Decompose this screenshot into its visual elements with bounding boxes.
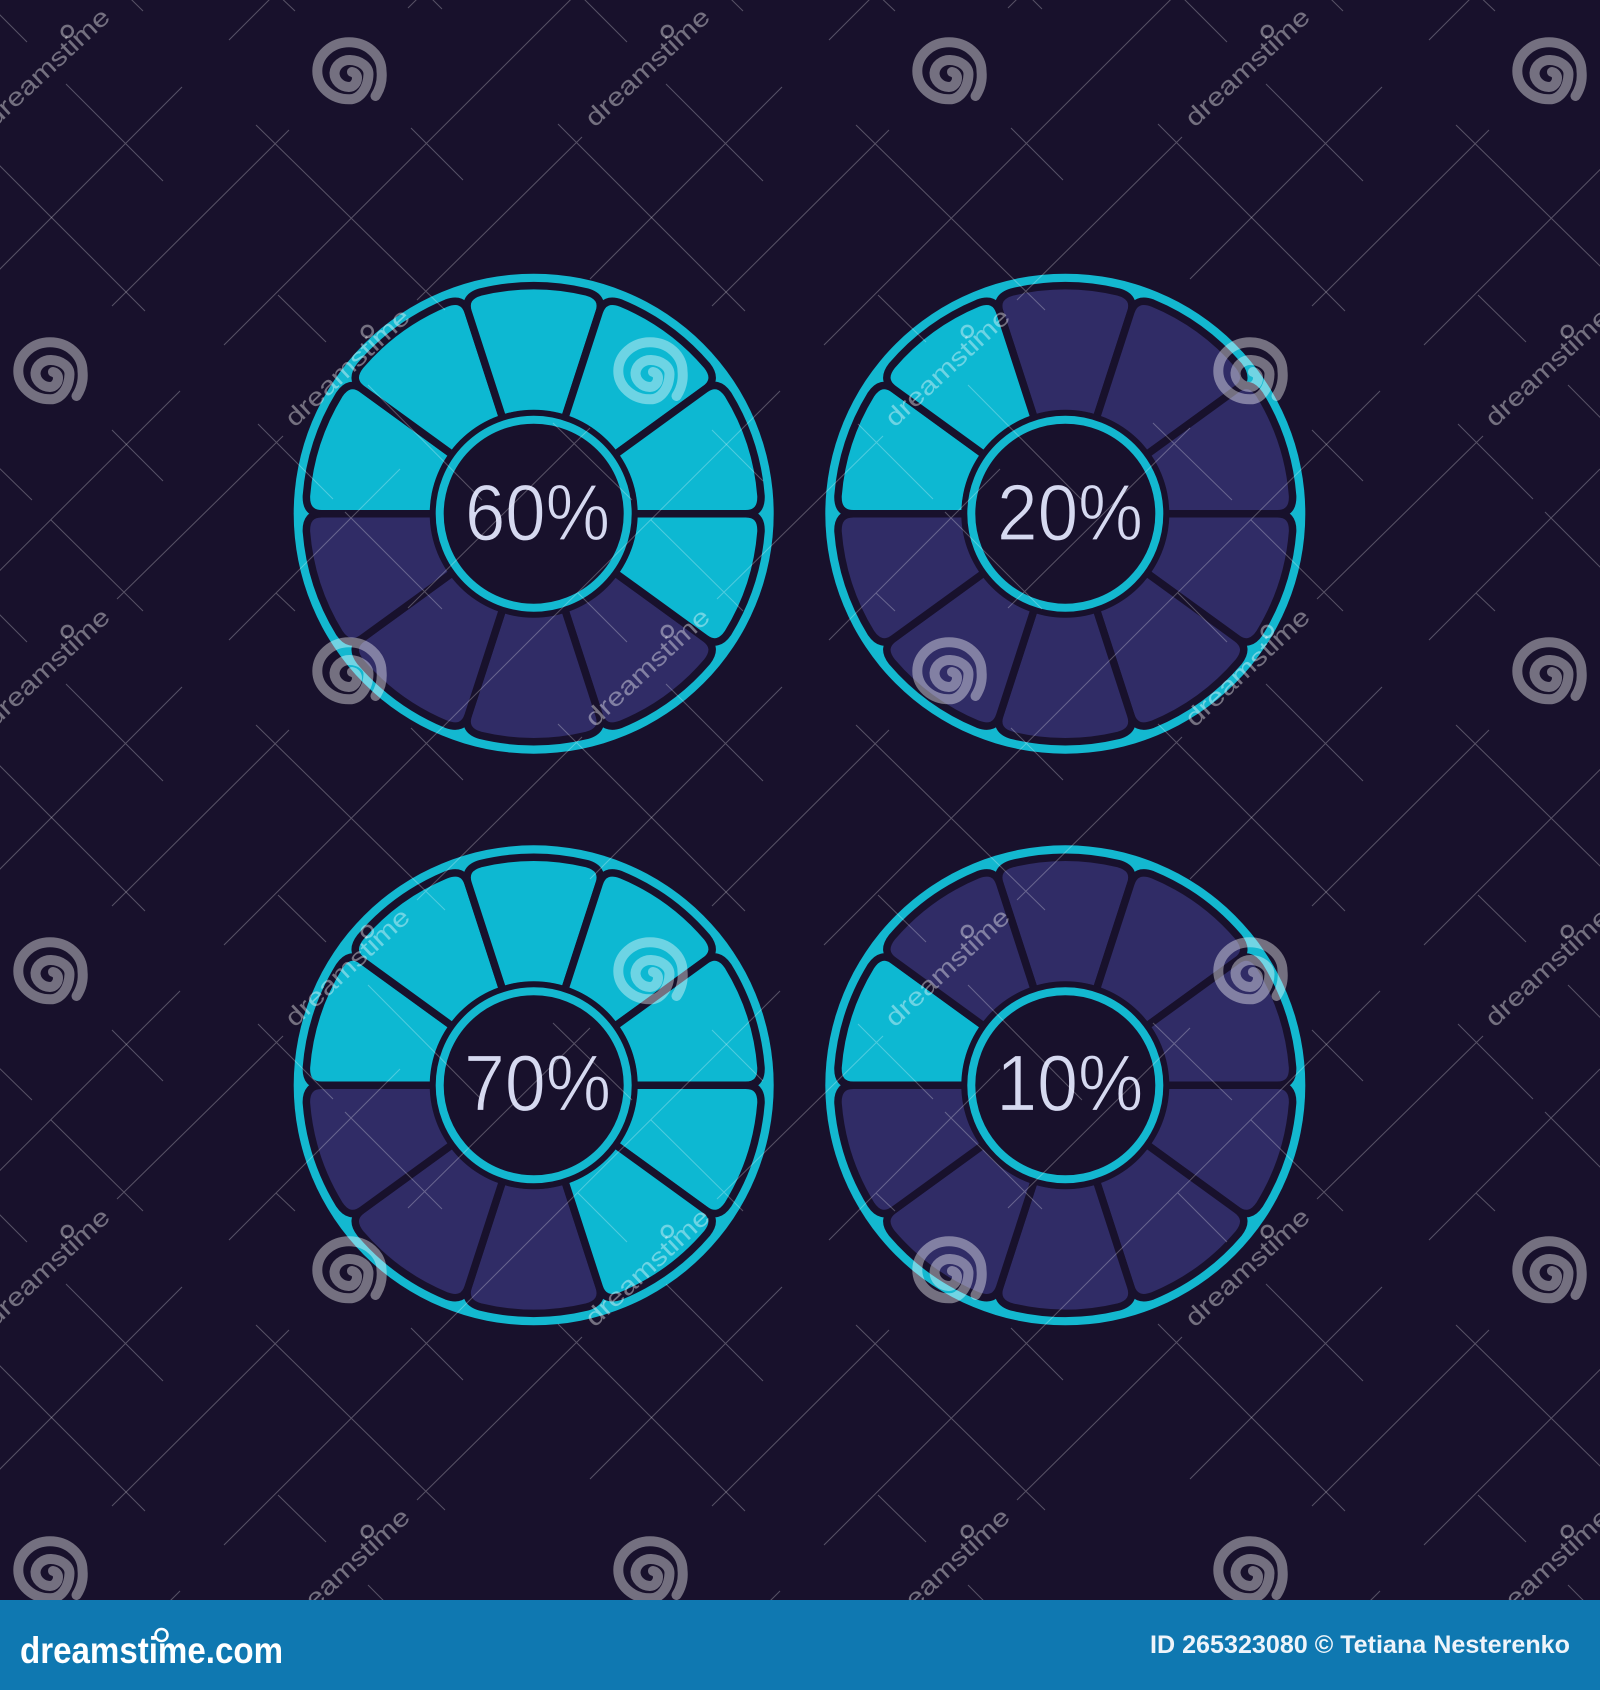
watermark wordmarks: dreamstime [880,903,1016,1032]
donut chart: 60% [294,274,774,754]
footer bar [0,1600,1600,1690]
watermark wordmarks: dreamstime [880,303,1016,432]
watermark wordmarks: dreamstime [1480,303,1600,432]
footer logo: dreamstime.com [20,1630,283,1671]
watermark wordmarks: dreamstime [580,3,716,132]
watermark wordmarks: dreamstime [280,303,416,432]
watermark wordmarks: dreamstime [1180,603,1316,732]
watermark wordmarks: dreamstime [1480,1503,1600,1632]
label: 60%: 60% [465,468,610,557]
watermark wordmarks: dreamstime [280,903,416,1032]
label: 20%: 20% [997,468,1143,557]
label: 10%: 10% [996,1039,1143,1128]
label: 70%: 70% [464,1039,611,1128]
watermark wordmarks: dreamstime [580,1203,716,1332]
watermark wordmarks: dreamstime [880,1503,1016,1632]
donut chart: 70% [294,845,774,1325]
watermark wordmarks: dreamstime [280,1503,416,1632]
watermark wordmarks: dreamstime [580,603,716,732]
watermark wordmarks: dreamstime [1180,3,1316,132]
watermark wordmarks: dreamstime [1180,1203,1316,1332]
donut chart: 10% [825,845,1305,1325]
watermark wordmarks: dreamstime [1480,903,1600,1032]
footer image credit: ID 265323080 © Tetiana Nesterenko [1150,1631,1570,1659]
donut chart: 20% [825,274,1305,754]
